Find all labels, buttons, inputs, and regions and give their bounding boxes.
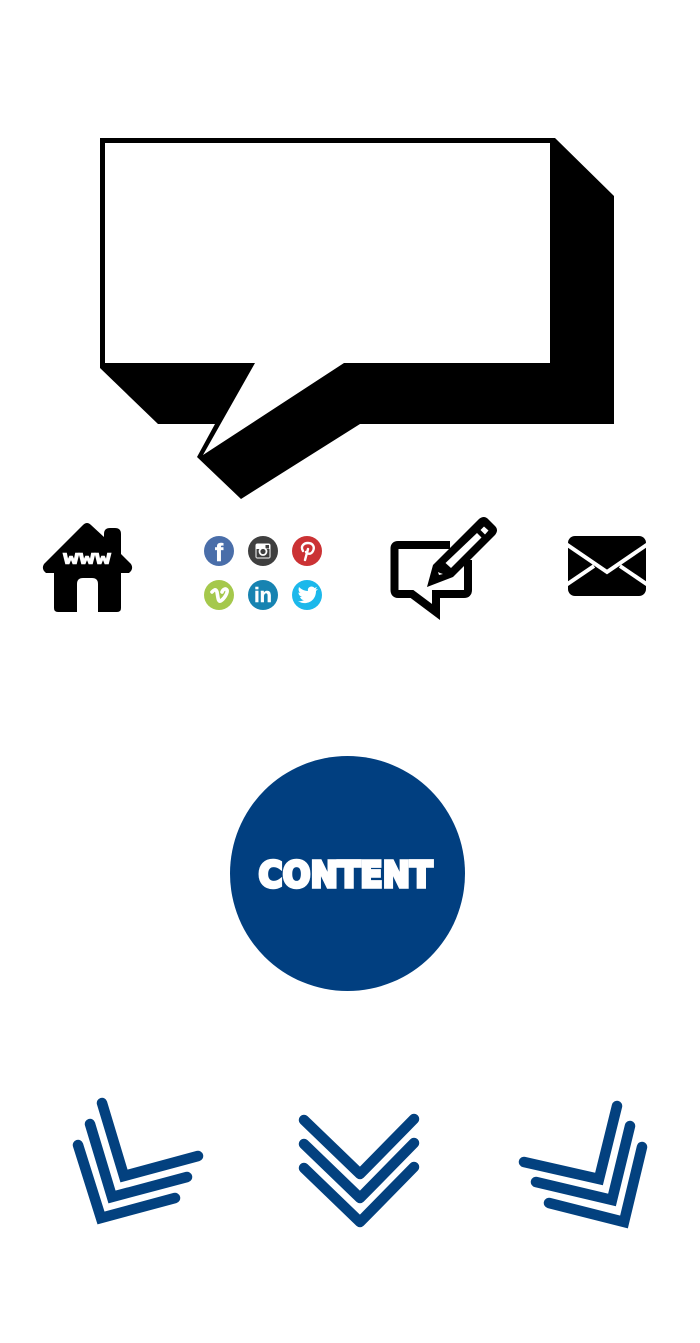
comment bubble outline — [394, 545, 468, 612]
social icons — [204, 536, 322, 610]
speech bubble — [100, 138, 614, 499]
icon: website home — [43, 523, 132, 612]
icon: pinterest — [292, 536, 322, 566]
icon: vimeo — [204, 580, 234, 610]
icon: comment with pen — [394, 517, 497, 612]
icon: envelope — [566, 536, 648, 596]
pen — [427, 517, 497, 587]
content label: CONTENT — [258, 855, 433, 896]
arrow: down-right chevrons — [524, 1106, 642, 1222]
icon: linkedin: in — [254, 585, 272, 607]
icon: twitter — [292, 580, 322, 610]
www label: WWW — [63, 551, 112, 570]
content circle — [230, 756, 465, 991]
arrow: down chevrons — [304, 1119, 414, 1222]
bubble 3D shadow — [100, 138, 614, 499]
arrow: down-left chevrons — [78, 1103, 198, 1218]
icon: instagram — [248, 536, 278, 566]
icon: facebook: f — [215, 539, 224, 567]
bubble white face — [105, 143, 550, 455]
